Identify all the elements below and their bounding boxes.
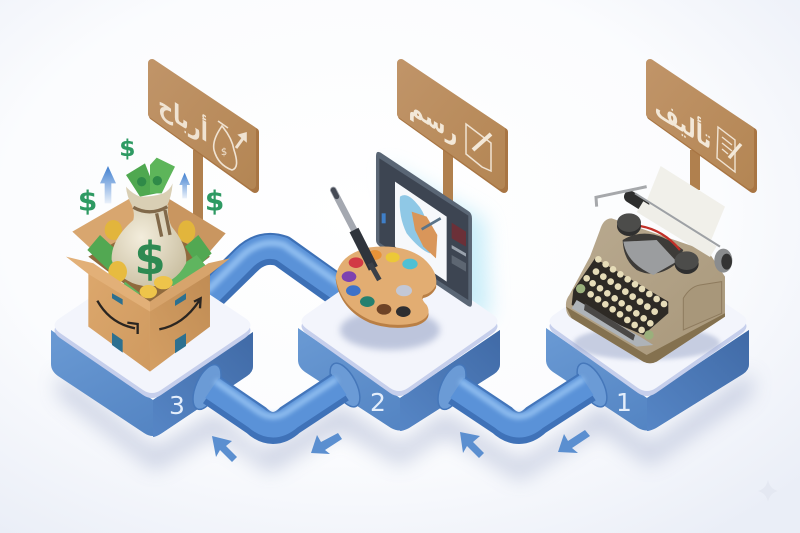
step number 1: 1 xyxy=(616,388,632,417)
step number 2: 2 xyxy=(370,388,386,417)
back flaps xyxy=(72,198,226,267)
bag neck xyxy=(126,183,173,211)
sign: drawing xyxy=(401,63,504,189)
front pipe between steps 2 and 1 xyxy=(432,359,613,428)
up arrows xyxy=(100,166,190,203)
shift keys xyxy=(576,284,654,340)
sign post: profits xyxy=(193,150,203,220)
platen xyxy=(630,193,720,252)
sign post: drawing xyxy=(443,150,453,210)
icon: money bag with arrow: $ xyxy=(221,147,227,158)
tablet glow xyxy=(385,165,490,320)
flow arrow 4 xyxy=(212,436,237,462)
icon: page with brush xyxy=(466,124,491,171)
bills in bag xyxy=(126,158,175,197)
step 3 platform xyxy=(51,259,253,437)
box left face xyxy=(88,273,150,372)
floating dollars: $ xyxy=(119,134,135,162)
floating dollars: $ xyxy=(78,185,97,218)
back pipe between steps 3 and 2 xyxy=(205,243,348,300)
keys xyxy=(583,256,667,333)
floating dollars xyxy=(78,134,224,218)
type basket xyxy=(623,234,683,274)
front pipe between steps 3 and 2 xyxy=(187,359,366,428)
bag dollar: $ xyxy=(134,232,166,285)
box right face xyxy=(150,273,210,372)
carriage knob xyxy=(714,249,732,273)
canvas area xyxy=(395,182,447,282)
rope xyxy=(133,207,170,237)
icon: paint palette and stylus xyxy=(333,190,440,350)
sign: writing xyxy=(650,63,753,189)
step 1 platform xyxy=(546,253,749,431)
icon: tablet with drawing app xyxy=(376,152,472,307)
carriage lever xyxy=(596,187,647,207)
floating dollars: $ xyxy=(205,185,224,218)
box interior xyxy=(88,223,210,303)
front flaps xyxy=(66,257,230,312)
artwork xyxy=(400,195,430,253)
coins xyxy=(108,261,173,298)
bag xyxy=(112,205,186,287)
smile logo left xyxy=(97,301,138,334)
icon: document with pencil xyxy=(717,127,741,172)
icon: open box with money bag xyxy=(66,134,230,372)
money and coins inside xyxy=(87,220,212,295)
sign post: writing xyxy=(690,150,700,190)
label: رسم xyxy=(409,88,457,150)
smile logo right xyxy=(159,298,201,329)
flow arrow 2 xyxy=(311,433,342,454)
paint wells xyxy=(342,250,418,317)
icon: typewriter xyxy=(566,166,732,363)
body xyxy=(566,218,725,363)
watermark star xyxy=(758,480,778,502)
color panel xyxy=(452,223,466,247)
flow arrow 1 xyxy=(558,430,590,453)
spools xyxy=(617,213,699,274)
flow arrow 3 xyxy=(460,432,484,458)
keyboard well xyxy=(572,258,668,335)
tape xyxy=(112,293,186,353)
space bar xyxy=(584,303,635,341)
stylus xyxy=(333,190,379,280)
space bar area xyxy=(572,300,653,347)
label: أرباح xyxy=(158,86,208,149)
label: تأليف xyxy=(655,88,711,156)
paper xyxy=(642,166,725,255)
ground shadows xyxy=(58,372,752,480)
sign: profits xyxy=(152,63,255,189)
step 2 platform xyxy=(298,253,500,431)
right side panel xyxy=(683,282,722,330)
tool bar xyxy=(382,213,386,223)
step number 3: 3 xyxy=(169,391,185,420)
